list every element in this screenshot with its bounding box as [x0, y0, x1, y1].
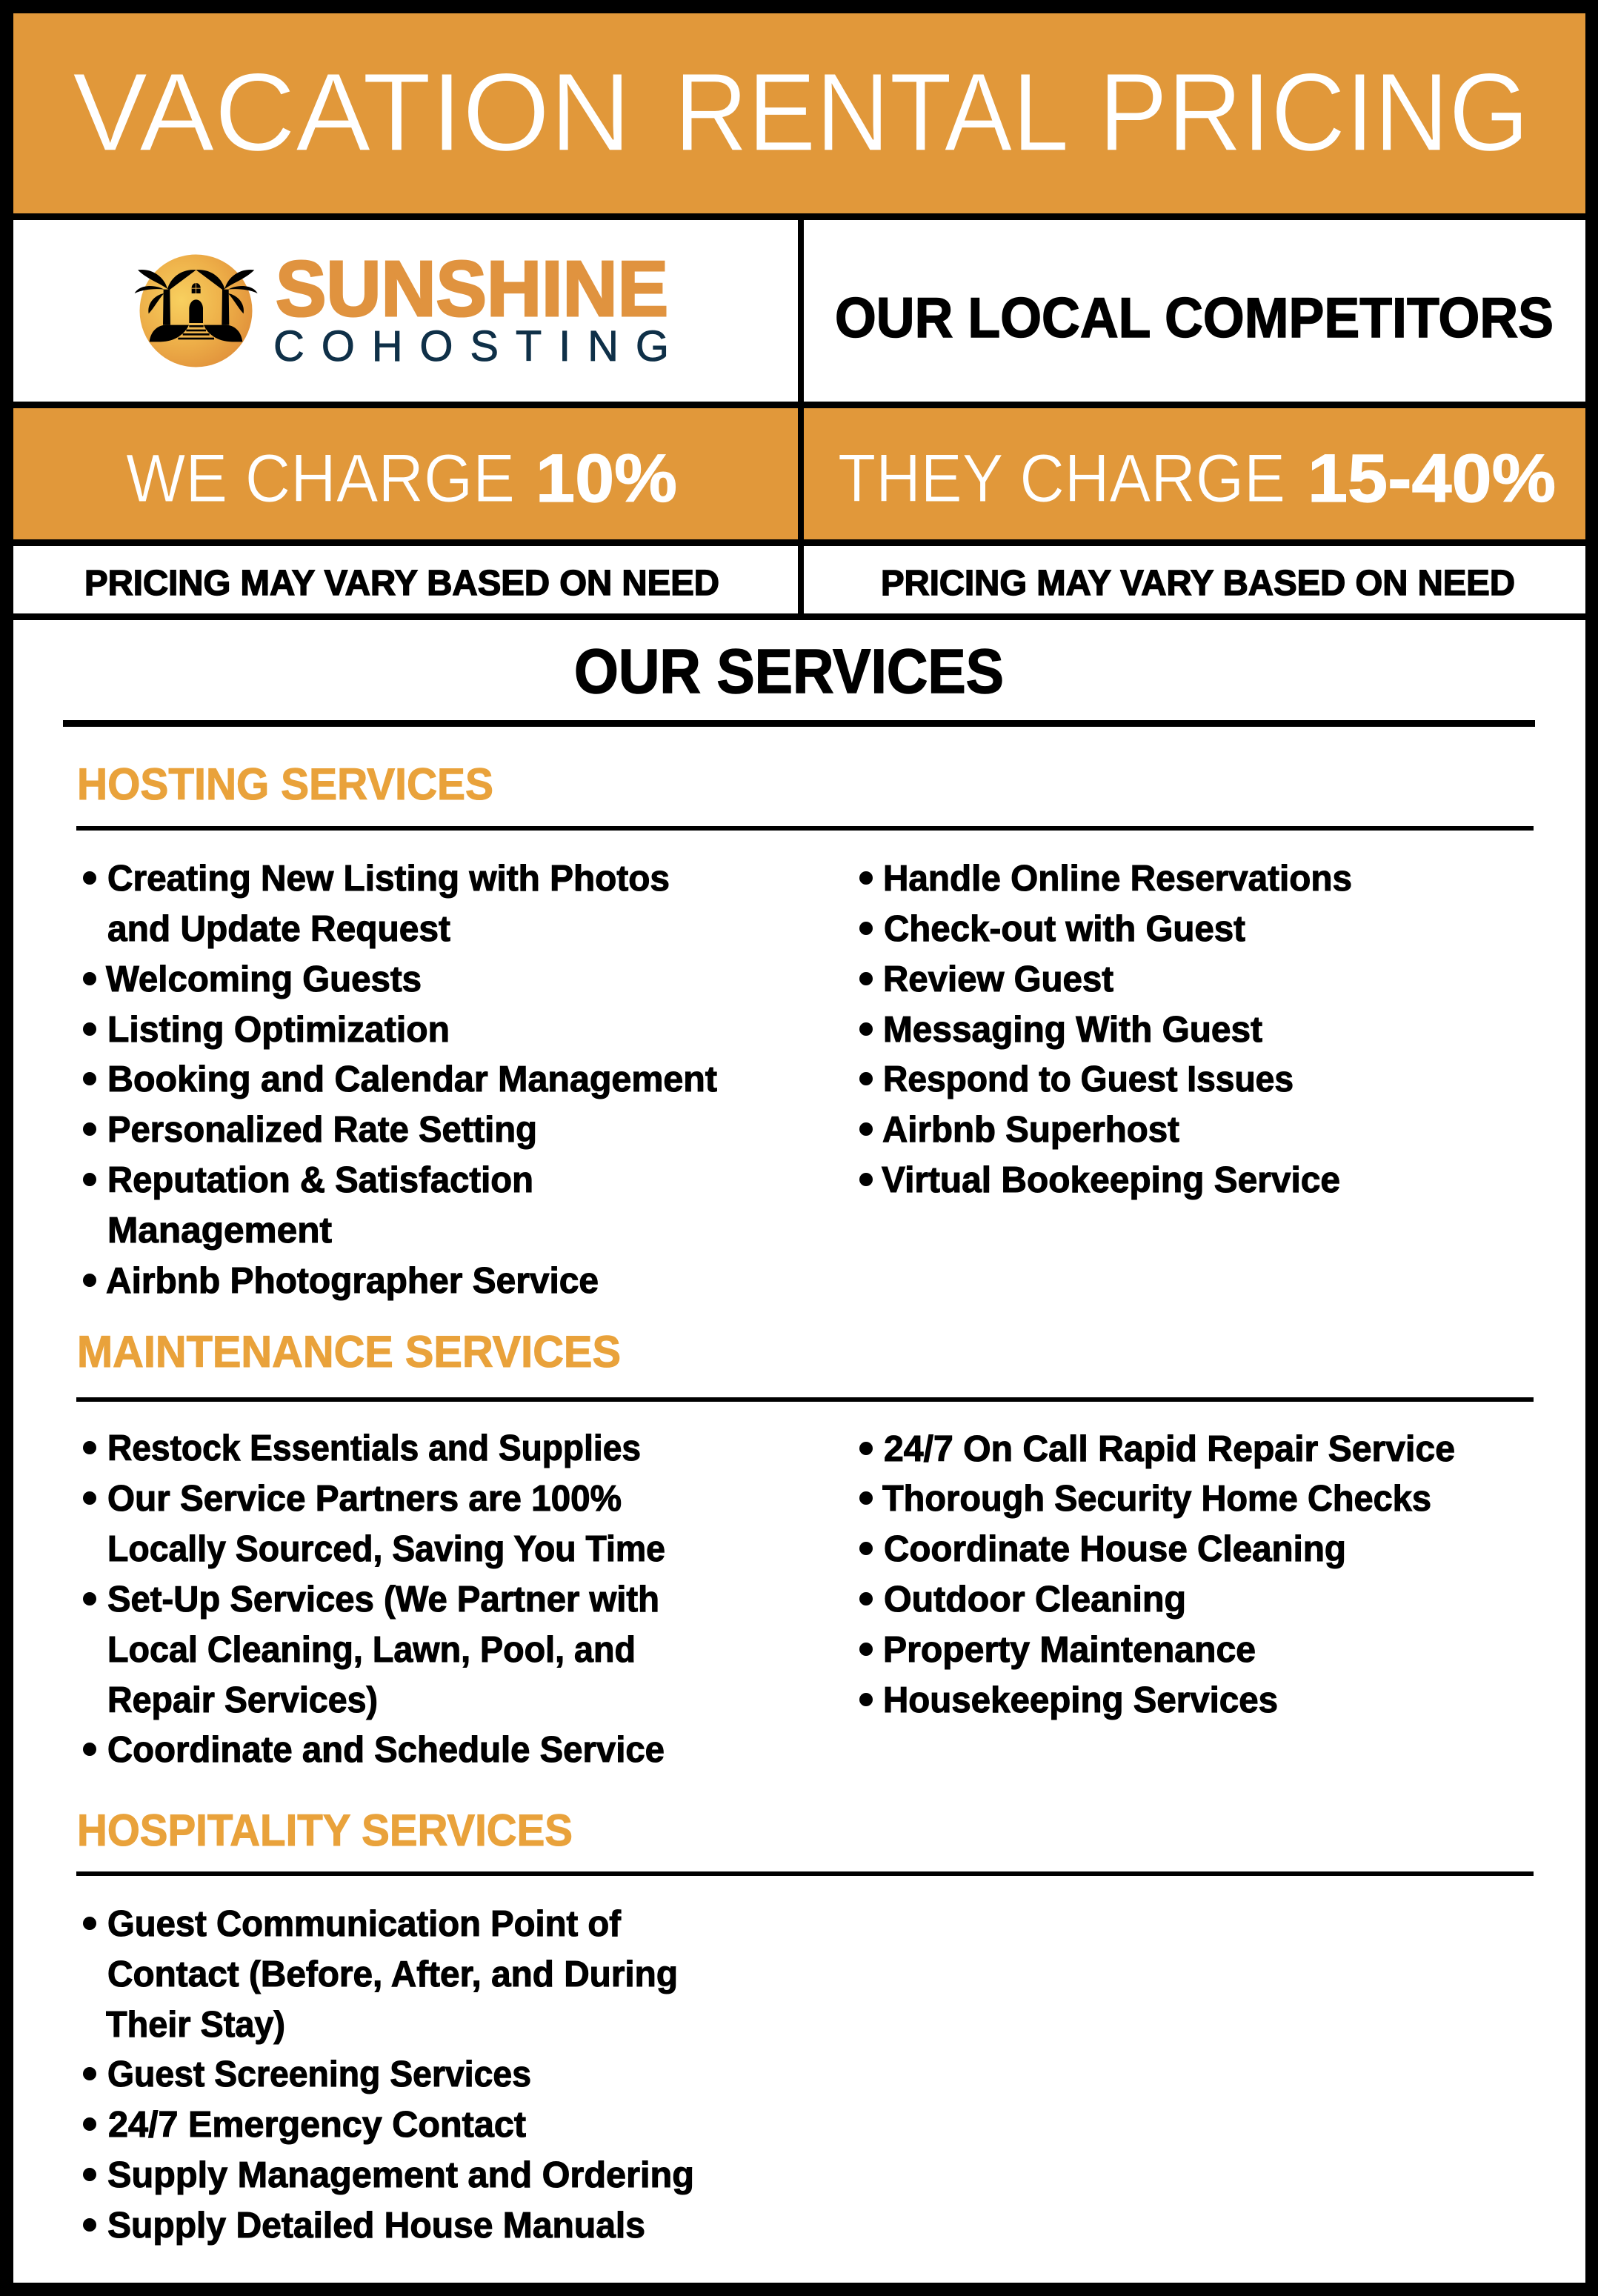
- note: our pricing: PRICING MAY VARY BASED ON NEED: [84, 564, 719, 603]
- list: hosting services right: Respond to Guest Issues: [883, 1059, 1294, 1099]
- list: hospitality services: Guest Screening Services: [107, 2054, 531, 2094]
- title: PRICING: [1099, 50, 1529, 174]
- list: hosting services left: Personalized Rate Setting: [107, 1110, 537, 1150]
- title: VACATION: [73, 50, 631, 174]
- list: hosting services left: [83, 859, 717, 1301]
- panel: competitor price: 15-40%: [1308, 441, 1556, 516]
- list: hosting services right: Virtual Bookeeping Service: [882, 1160, 1340, 1200]
- list: maintenance services left: Restock Essentials and Supplies: [107, 1428, 641, 1468]
- list: maintenance services left: Repair Services): [107, 1680, 378, 1720]
- heading: hospitality services: HOSPITALITY SERVICES: [77, 1806, 573, 1855]
- list: maintenance services right: [859, 1429, 1455, 1720]
- list: hosting services left: Welcoming Guests: [106, 959, 422, 999]
- list: maintenance services right: Property Maintenance: [883, 1630, 1256, 1670]
- list: hospitality services: Supply Detailed House Manuals: [107, 2206, 645, 2246]
- panel: competitor price: THEY CHARGE: [838, 441, 1285, 516]
- logo subtitle: COHOSTING: [273, 322, 669, 370]
- icon: sun, house and palm trees: [135, 255, 258, 367]
- panel: our price: WE CHARGE: [126, 441, 515, 516]
- list: hospitality services: 24/7 Emergency Contact: [108, 2105, 526, 2145]
- list: maintenance services right: Thorough Security Home Checks: [882, 1479, 1431, 1519]
- list: maintenance services left: Coordinate and Schedule Service: [107, 1730, 665, 1770]
- list: hospitality services: Guest Communication Point of: [107, 1904, 622, 1944]
- list: hosting services left: Listing Optimization: [107, 1010, 450, 1050]
- heading: hosting services: HOSTING SERVICES: [77, 759, 493, 809]
- list: maintenance services right: 24/7 On Call Rapid Repair Service: [884, 1429, 1455, 1469]
- list: maintenance services left: [83, 1428, 665, 1770]
- note: competitor pricing: [804, 546, 1585, 613]
- panel: competitors heading: [804, 220, 1585, 402]
- list: hospitality services: Their Stay): [106, 2005, 285, 2045]
- list: hosting services left: Reputation & Satisfaction: [107, 1160, 533, 1200]
- panel: our price: 10%: [536, 441, 677, 516]
- list: hosting services left: and Update Request: [107, 909, 450, 949]
- list: maintenance services right: Coordinate House Cleaning: [884, 1529, 1346, 1569]
- list: maintenance services left: Locally Sourced, Saving You Time: [107, 1529, 665, 1569]
- panel: competitors heading: OUR LOCAL COMPETITORS: [835, 287, 1554, 350]
- note: competitor pricing: PRICING MAY VARY BASED ON NEED: [881, 564, 1515, 603]
- title banner: [13, 13, 1585, 213]
- list: hosting services left: Creating New Listing with Photos: [107, 859, 670, 899]
- list: hosting services right: [859, 859, 1352, 1200]
- list: hosting services left: Booking and Calendar Management: [107, 1059, 717, 1099]
- list: maintenance services left: Local Cleaning, Lawn, Pool, and: [107, 1630, 636, 1670]
- list: hosting services left: Management: [107, 1211, 332, 1251]
- list: maintenance services right: Housekeeping Services: [883, 1680, 1278, 1720]
- list: hosting services right: Review Guest: [883, 959, 1113, 999]
- list: hospitality services: Supply Management and Ordering: [107, 2155, 694, 2195]
- panel: company logo: [13, 220, 798, 402]
- services heading: OUR SERVICES: [574, 636, 1004, 706]
- list: hospitality services: [83, 1904, 694, 2246]
- list: maintenance services right: Outdoor Cleaning: [884, 1580, 1186, 1620]
- heading: maintenance services: MAINTENANCE SERVICES: [77, 1327, 621, 1377]
- list: maintenance services left: Our Service Partners are 100%: [107, 1479, 622, 1519]
- list: hosting services left: Airbnb Photographer Service: [106, 1261, 599, 1301]
- list: hosting services right: Airbnb Superhost: [882, 1110, 1179, 1150]
- list: hosting services right: Handle Online Reservations: [883, 859, 1352, 899]
- logo wordmark: SUNSHINE: [276, 245, 668, 333]
- list: hospitality services: Contact (Before, After, and During: [107, 1954, 678, 1994]
- list: maintenance services left: Set-Up Services (We Partner with: [107, 1580, 659, 1620]
- panel: our price: [13, 408, 798, 539]
- note: our pricing: [13, 546, 798, 613]
- list: hosting services right: Check-out with Guest: [884, 909, 1245, 949]
- title: [73, 50, 1529, 174]
- panel: competitor price: [804, 408, 1585, 539]
- panel: our services: [13, 620, 1585, 2283]
- list: hosting services right: Messaging With Guest: [883, 1010, 1262, 1050]
- title: RENTAL: [674, 50, 1069, 174]
